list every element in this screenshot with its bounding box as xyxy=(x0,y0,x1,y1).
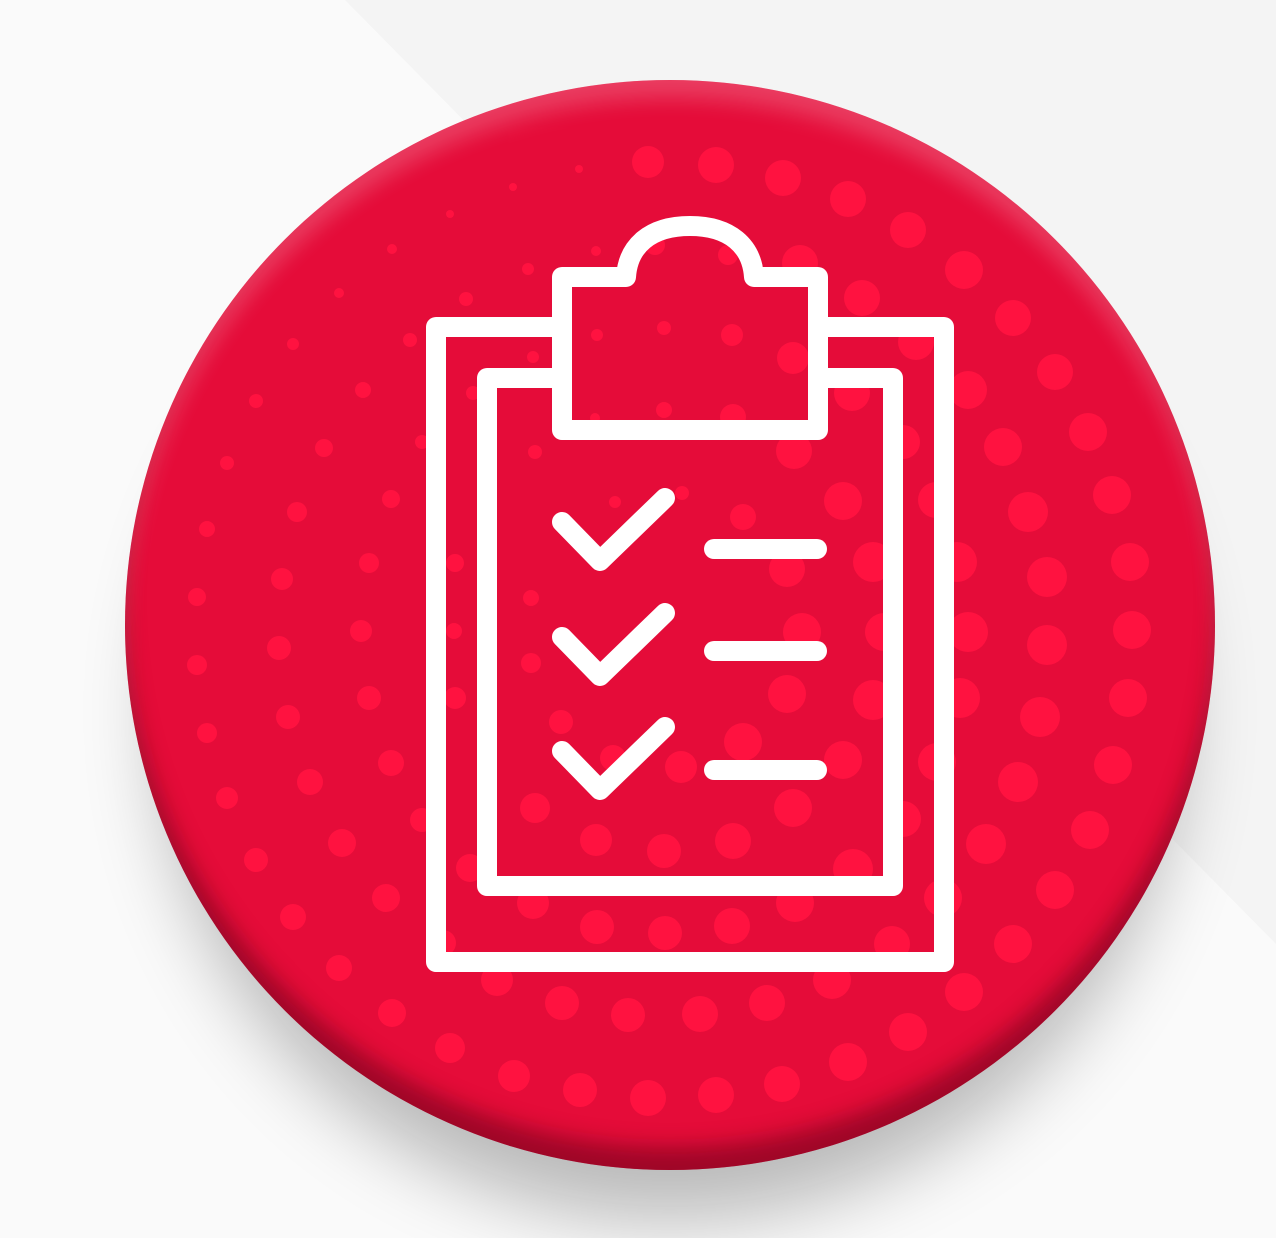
clipboard outer board xyxy=(436,327,944,962)
clipboard clip xyxy=(562,226,818,430)
clipboard paper sheet xyxy=(487,378,893,886)
halftone dot pattern xyxy=(187,146,1151,1116)
rim highlight and shade xyxy=(125,80,1215,1170)
checklist row 2 xyxy=(562,613,817,676)
red circular badge xyxy=(125,80,1215,1170)
checklist row 1 xyxy=(562,498,817,561)
badge drop shadow xyxy=(158,204,1182,1220)
icon: clipboard with checklist xyxy=(436,226,944,962)
checklist row 3 xyxy=(562,727,817,790)
